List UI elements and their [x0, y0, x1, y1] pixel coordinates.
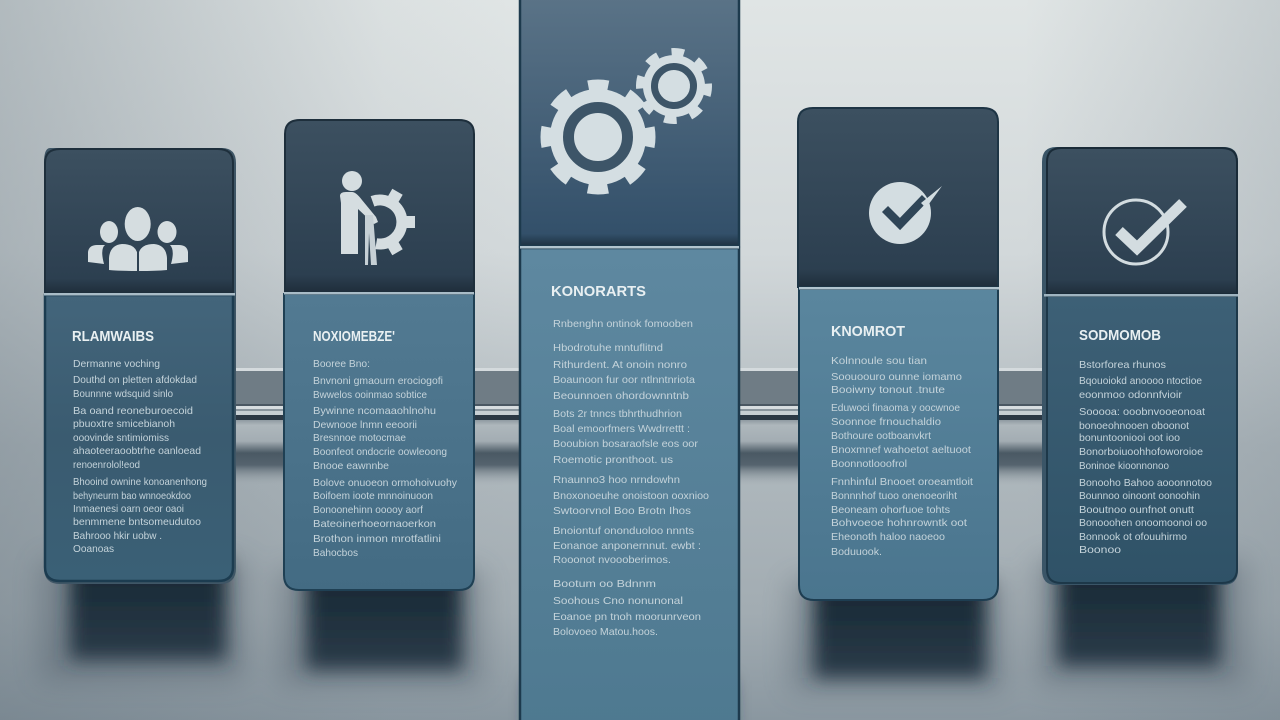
card 5 header	[1047, 148, 1237, 294]
icon: solid check circle	[869, 182, 942, 244]
card 2 text: Booree Bno:	[313, 358, 370, 370]
card 1 text: Ba oand reoneburoecoid	[73, 405, 193, 417]
card 5 text: Bounnoo oinoont oonoohin	[1079, 490, 1200, 502]
card 5 text: Bqouoiokd anoooo ntoctioe	[1079, 375, 1202, 387]
card 5 title: SODMOMOB	[1079, 327, 1161, 344]
card 1 text: benmmene bntsomeudutoo	[73, 516, 201, 528]
card 5 text: Boninoe kioonnonoo	[1079, 460, 1169, 472]
card 4 text: Soouoouro ounne iomamo	[831, 371, 962, 383]
card 4 text: Kolnnoule sou tian	[831, 355, 927, 367]
card 3 text: Rooonot nvoooberimos.	[553, 554, 671, 566]
card 2 text: Brothon inmon mrotfatlini	[313, 533, 441, 545]
card 1 title: RLAMWAIBS	[72, 328, 154, 345]
card 3 text: Booubion bosaraofsle eos oor	[553, 438, 699, 450]
card 3 text: Rnaunno3 hoo nrndowhn	[553, 474, 680, 486]
card 2 text: Bresnnoe motocmae	[313, 432, 406, 444]
card 4 text: Soonnoe frnouchaldio	[831, 416, 941, 428]
card 4 text: Bohvoeoe hohnrowntk oot	[831, 517, 967, 529]
card 3 text: Bolovoeo Matou.hoos.	[553, 626, 658, 638]
card 2 text: Bnvnoni gmaourn erociogofi	[313, 375, 443, 387]
card 3 text: Rithurdent. At onoin nonro	[553, 359, 687, 371]
icon: large gear	[546, 85, 650, 189]
card 1 text: Bhooind ownine konoanenhong	[73, 476, 207, 488]
card 5 text: Bstorforea rhunos	[1079, 359, 1166, 371]
icon: person with gear	[340, 171, 415, 265]
card 5	[1042, 147, 1238, 585]
card 4 title: KNOMROT	[831, 323, 905, 340]
card 1 text: Douthd on pletten afdokdad	[73, 374, 197, 386]
card 5 text: eoonmoo odonnfvioir	[1079, 389, 1183, 401]
card 1 text: pbuoxtre smicebianoh	[73, 418, 175, 430]
card 1 body	[45, 295, 233, 581]
card 4 text: Boduuook.	[831, 546, 882, 558]
card 3 text: Boaunoon fur oor ntlnntnriota	[553, 374, 695, 386]
card 2 text: Bonoonehinn ooooy aorf	[313, 504, 423, 516]
card 1 text: Inmaenesi oarn oeor oaoi	[73, 503, 184, 515]
card 4 text: Bonnnhof tuoo onenoeoriht	[831, 490, 957, 502]
card 2 header	[285, 120, 474, 292]
card 3 text: Bnoiontuf ononduoloo nnnts	[553, 525, 694, 537]
card 1 text: ooovinde sntimiomiss	[73, 432, 169, 444]
card 5 body	[1047, 296, 1237, 583]
card 2 text: Bolove onuoeon ormohoivuohy	[313, 477, 458, 489]
card 2 text	[313, 358, 458, 559]
icon: small gear	[637, 49, 711, 123]
card 4 text: Bnoxmnef wahoetot aeltuoot	[831, 444, 971, 456]
card 2 body	[284, 294, 474, 590]
card 5 text: Booutnoo ounfnot onutt	[1079, 504, 1194, 516]
card 2 text: Bateoinerhoeornaoerkon	[313, 518, 436, 530]
card 2 text: Boifoem ioote mnnoinuoon	[313, 490, 433, 502]
card 3 text: Boal emoorfmers Wwdrrettt :	[553, 423, 690, 435]
card 2 divider	[284, 292, 474, 294]
card 3 text: Eoanoe pn tnoh moorunrveon	[553, 611, 701, 623]
card drop shadows	[70, 560, 1220, 720]
card 1 edge	[44, 148, 236, 584]
card 1 text: ahaoteeraoobtrhe oanloead	[73, 445, 201, 457]
card 4 text: Fnnhinful Bnooet oroeamtloit	[831, 476, 973, 488]
card 5 divider	[1044, 294, 1238, 296]
card 4 header	[798, 108, 998, 287]
card 4 text: Beoneam ohorfuoe tohts	[831, 504, 950, 516]
card 1 text: Bounnne wdsquid sinlo	[73, 388, 173, 400]
card 4 text: Eduwoci finaoma y oocwnoe	[831, 402, 960, 414]
card 4	[798, 108, 999, 600]
card 5 text: bonoeohnooen oboonot	[1079, 420, 1189, 432]
card 5 edge	[1042, 147, 1238, 585]
card 2 text: Dewnooe lnmn eeoorii	[313, 419, 417, 431]
card 4 text: Boonnotlooofrol	[831, 458, 907, 470]
card 2 text: Bwwelos ooinmao sobtice	[313, 389, 427, 401]
card 2 title: NOXIOMEBZE'	[313, 328, 395, 345]
icon: outlined check circle	[1104, 200, 1183, 264]
card 3 text: Roemotic pronthoot. us	[553, 454, 673, 466]
icon: people group	[88, 207, 188, 271]
card 1 text: behyneurm bao wnnoeokdoo	[73, 490, 191, 502]
card 5 text: Boonoo	[1079, 544, 1121, 556]
card 3 text: Bootum oo Bdnnm	[553, 578, 656, 590]
card 3 text: Eonanoe anponernnut. ewbt :	[553, 540, 701, 552]
card 3	[520, 0, 739, 720]
card 3 divider	[520, 246, 739, 248]
card 1 text	[73, 358, 207, 555]
card 3 text: Bnoxonoeuhe onoistoon ooxnioo	[553, 490, 709, 502]
card 3 title: KONORARTS	[551, 283, 646, 300]
card 3 text: Beounnoen ohordownntnb	[553, 390, 689, 402]
card 1 text: Dermanne voching	[73, 358, 160, 370]
card 2 text: Boonfeot ondocrie oowleoong	[313, 446, 447, 458]
card 5 text: bonuntooniooi oot ioo	[1079, 432, 1180, 444]
card 1 text: Ooanoas	[73, 543, 114, 555]
card 3 text: Hbodrotuhe mntuflitnd	[553, 342, 663, 354]
card 3 text: Soohous Cno nonunonal	[553, 595, 683, 607]
card 4 text	[831, 355, 973, 558]
card 2	[284, 120, 474, 590]
card 3 text: Rnbenghn ontinok fomooben	[553, 318, 693, 330]
card 4 text: Booiwny tonout .tnute	[831, 384, 945, 396]
connector bar	[230, 368, 1050, 486]
card 1 text: Bahrooo hkir uobw .	[73, 530, 162, 542]
card 5 text: Bonnook ot ofouuhirmo	[1079, 531, 1187, 543]
card 3 body	[520, 248, 739, 720]
card 4 text: Bothoure ootboanvkrt	[831, 430, 931, 442]
card 5 text: Bonooho Bahoo aooonnotoo	[1079, 477, 1212, 489]
card 1 text: renoenrolol!eod	[73, 459, 140, 471]
card 3 text	[553, 318, 709, 638]
card 4 divider	[799, 287, 999, 290]
card 2 text: Bahocbos	[313, 547, 358, 559]
card 1	[44, 148, 236, 584]
card 3 text: Bots 2r tnncs tbhrthudhrion	[553, 408, 682, 420]
card 5 text: Bonooohen onoomoonoi oo	[1079, 517, 1207, 529]
card 2 text: Bywinne ncomaaohlnohu	[313, 405, 436, 417]
card 4 body	[799, 289, 998, 600]
card 1 divider	[44, 293, 235, 296]
card 5 text	[1079, 359, 1212, 556]
card 1 header	[45, 149, 233, 293]
card 2 text: Bnooe eawnnbe	[313, 460, 389, 472]
card halo shadows	[40, 560, 1246, 690]
card 5 text: Bonorboiuoohhofoworoioe	[1079, 446, 1203, 458]
card 5 text: Sooooa: ooobnvooeonoat	[1079, 406, 1205, 418]
card 3 header	[520, 0, 739, 246]
card 4 text: Eheonoth haloo naoeoo	[831, 531, 945, 543]
card 3 text: Swtoorvnol Boo Brotn Ihos	[553, 505, 691, 517]
